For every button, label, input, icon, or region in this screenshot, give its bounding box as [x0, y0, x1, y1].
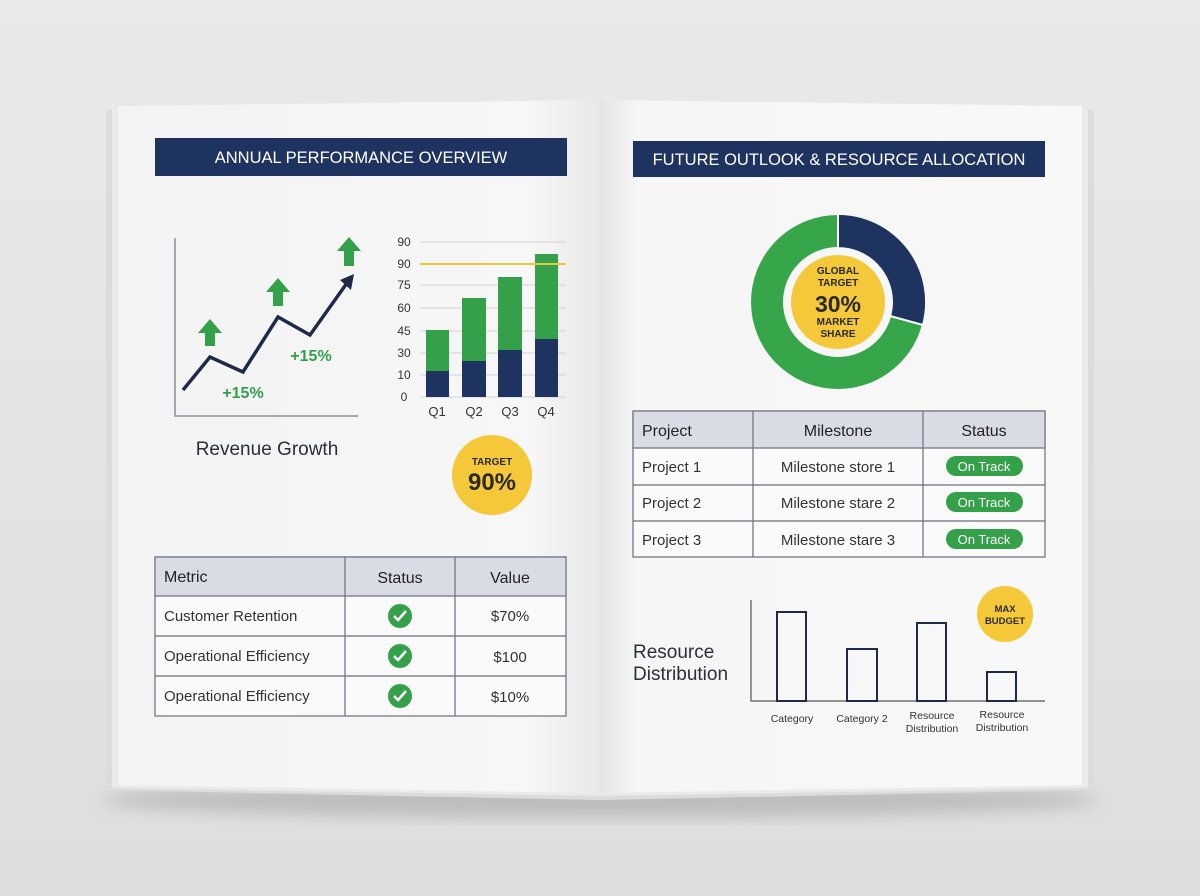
bar chart: resource distribution: Category 2 [836, 713, 888, 725]
bar chart: quarterly: 90 [397, 235, 411, 249]
status pills: On Track [958, 532, 1011, 547]
bar chart: resource distribution [751, 600, 1045, 735]
icon: green up arrows [198, 237, 361, 346]
status pills: On Track [958, 495, 1011, 510]
bar chart: resource distribution: Resource [980, 709, 1025, 721]
donut chart: market share [767, 214, 923, 373]
donut chart: market share: MARKET [817, 317, 859, 328]
table: metrics: Operational Efficiency [164, 648, 310, 665]
bar chart: quarterly: 90 [397, 257, 411, 271]
table: projects: Status [961, 423, 1007, 440]
badge: max budget: MAX [994, 604, 1016, 615]
table: metrics: Metric [164, 569, 208, 586]
label: revenue growth: Revenue Growth [196, 439, 338, 460]
table: metrics [155, 557, 566, 716]
bar chart: quarterly: 75 [397, 278, 411, 292]
table: metrics: $100 [493, 649, 527, 666]
table: metrics: Value [490, 570, 530, 587]
donut chart: market share: GLOBAL [817, 266, 859, 277]
bar chart: quarterly: 45 [397, 324, 411, 338]
donut chart: market share: TARGET [818, 278, 858, 289]
status pills: On Track [958, 459, 1011, 474]
badge: target 90% [452, 435, 532, 515]
table: metrics: Status [377, 570, 423, 587]
table: projects: Project 3 [642, 532, 701, 549]
badge: max budget: BUDGET [985, 616, 1025, 627]
badge: max budget [977, 586, 1033, 642]
table: metrics: $10% [491, 689, 529, 706]
book: right page [600, 100, 1094, 800]
line chart: revenue growth: +15% [290, 348, 332, 365]
donut chart: market share: SHARE [820, 329, 856, 340]
bar chart: quarterly: 10 [397, 368, 411, 382]
heading: annual performance overview: ANNUAL PERFORMANCE OVERVIEW [215, 149, 508, 167]
table: metrics: Customer Retention [164, 608, 297, 625]
bar chart: quarterly: Q2 [465, 404, 483, 419]
table: projects: Project 1 [642, 459, 701, 476]
line chart: revenue growth [175, 237, 361, 416]
table: projects: Project [642, 423, 692, 440]
table: metrics: Operational Efficiency [164, 688, 310, 705]
table: projects: Milestone stare 3 [781, 532, 895, 549]
label: resource distribution: Distribution [633, 664, 728, 685]
status pills [946, 456, 1023, 549]
bar chart: quarterly: 60 [397, 301, 411, 315]
heading: future outlook [633, 141, 1045, 177]
badge: target 90%: 90% [468, 469, 516, 496]
label: resource distribution: Resource [633, 642, 714, 663]
table: projects: Project 2 [642, 495, 701, 512]
table: projects: Milestone stare 2 [781, 495, 895, 512]
bar chart: resource distribution: Distribution [906, 723, 958, 735]
bar chart: quarterly: 30 [397, 346, 411, 360]
bar chart: quarterly: Q3 [501, 404, 519, 419]
table: projects [633, 411, 1045, 557]
label: resource distribution [633, 642, 728, 685]
line chart: revenue growth: +15% [222, 385, 264, 402]
heading: annual performance overview [155, 138, 567, 176]
bar chart: quarterly: 0 [401, 390, 408, 404]
bar chart: resource distribution: Resource [910, 710, 955, 722]
heading: future outlook: FUTURE OUTLOOK & RESOURCE ALLOCATION [653, 151, 1025, 169]
bar chart: resource distribution: Category [771, 713, 814, 725]
icon: check marks [388, 604, 412, 708]
badge: target 90%: TARGET [472, 457, 512, 468]
bar chart: quarterly [397, 235, 566, 419]
table: metrics: $70% [491, 608, 529, 625]
table: projects: Milestone [804, 423, 872, 440]
book: left page [106, 100, 600, 800]
donut chart: market share: 30% [815, 291, 861, 317]
bar chart: quarterly: Q1 [428, 404, 446, 419]
bar chart: resource distribution: Distribution [976, 722, 1028, 734]
bar chart: quarterly: Q4 [537, 404, 555, 419]
table: projects: Milestone store 1 [781, 459, 895, 476]
